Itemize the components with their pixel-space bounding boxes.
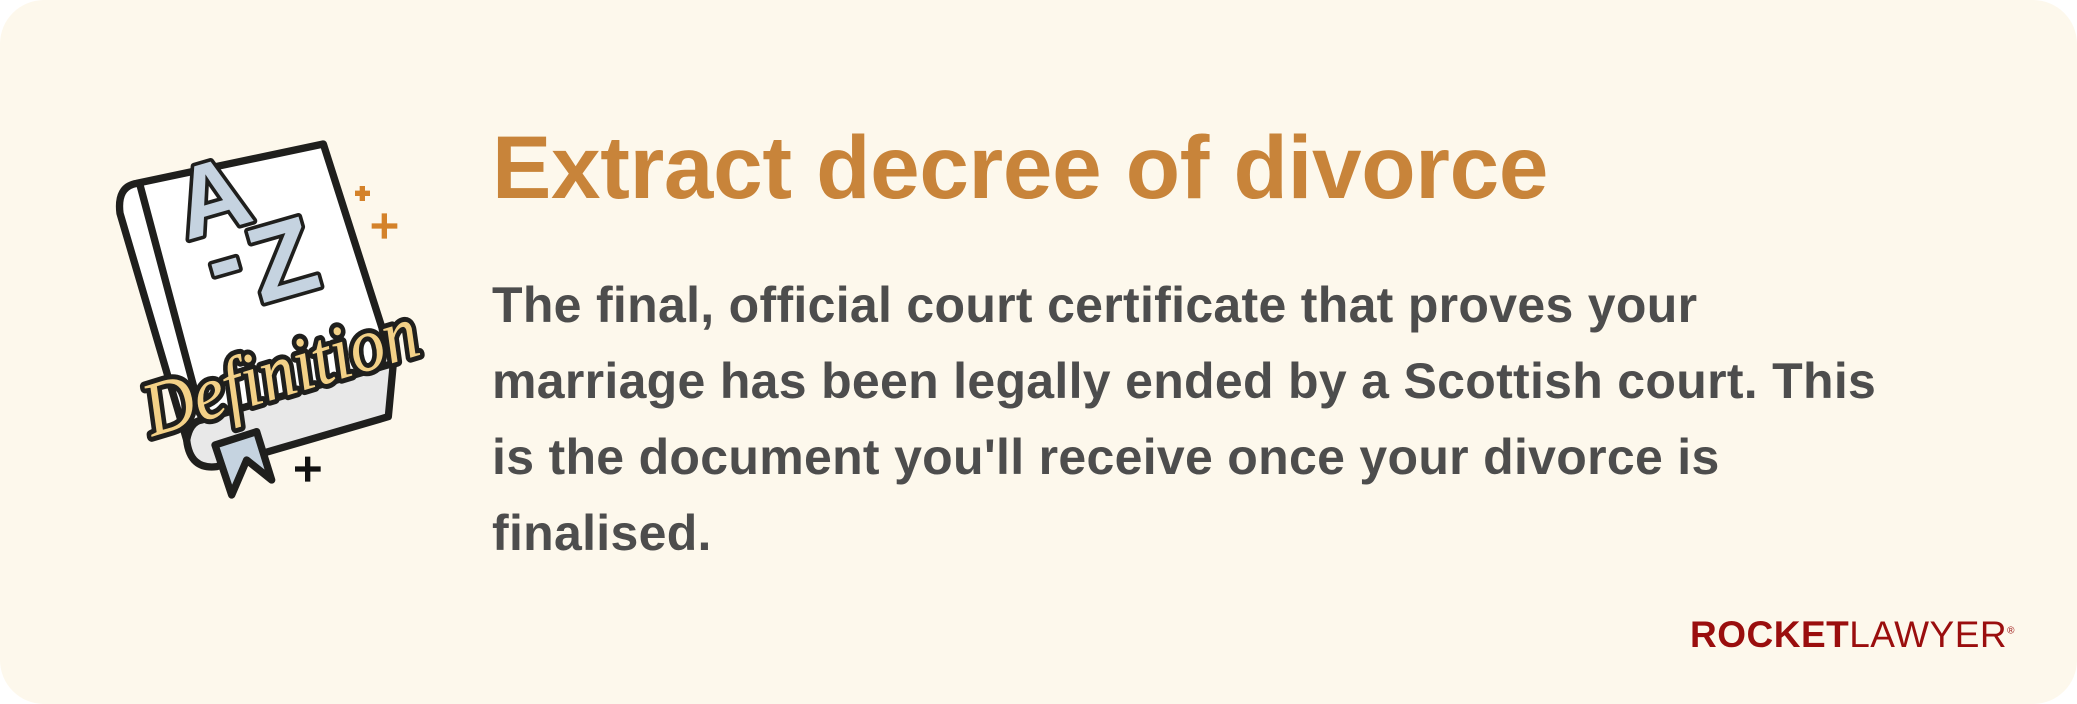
- icon: definition book: -: [192, 201, 255, 317]
- text block: definition: The final, official court certificate that proves your: [492, 277, 1697, 333]
- icon: definition book: [116, 134, 428, 499]
- title: Extract decree of divorce: [492, 117, 1548, 217]
- text block: definition: [492, 277, 1876, 561]
- text block: definition: is the document you'll receive once your divorce is: [492, 429, 1720, 485]
- logo: Rocket Lawyer: ROCKETLAWYER®: [1690, 614, 2015, 655]
- icon: definition book: A: [162, 134, 262, 261]
- text block: definition: finalised.: [492, 505, 712, 561]
- icon: definition book: Z: [234, 193, 330, 326]
- icon: definition book: Definition: [132, 289, 428, 453]
- text block: definition: marriage has been legally ended by a Scottish court. This: [492, 353, 1876, 409]
